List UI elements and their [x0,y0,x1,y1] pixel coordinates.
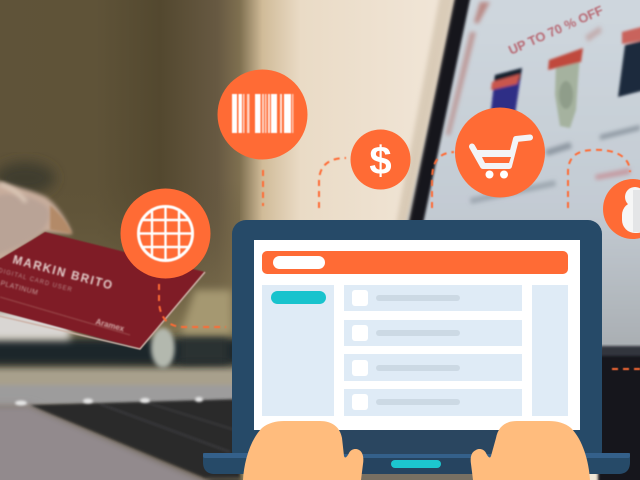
icon: barcode [218,70,308,160]
laptop lid [232,220,602,465]
blurred product: phone [490,68,522,118]
dark desk right [598,350,640,480]
list row 4 [344,389,522,416]
right hand [471,421,590,480]
icon: globe [120,188,210,278]
blurred side text [446,2,640,204]
bright object near card [151,328,175,368]
hand and credit card [0,180,205,349]
right sidebar [532,285,568,416]
card details: PLATINUM [0,280,39,297]
trackpad button [391,460,441,468]
icon: dollar: $ [369,139,392,183]
screen [254,240,580,430]
table band [0,366,240,406]
icon: partial circle at right edge [603,179,640,239]
hand [0,180,72,262]
blurred product: watch [548,48,583,128]
card logo: Aramex [94,317,126,334]
blurred product: dark box [618,26,640,97]
card name: MARKIN BRITO [11,254,115,293]
icon: dollar [350,130,410,190]
card [0,232,205,349]
dashed connectors [159,150,640,369]
desk surface [0,404,230,480]
list row 1 [344,285,522,311]
blurred sale text: UP TO 70 % OFF [506,2,606,58]
left hand [243,421,363,480]
laptop illustration [203,220,630,480]
icon: shopping cart [455,108,545,198]
laptop base [203,430,630,480]
keyboard [30,399,240,478]
header bar [262,251,568,274]
dark band behind card [0,338,240,365]
laptop screen in photo [396,0,640,356]
left sidebar [262,285,334,416]
list row 2 [344,320,522,346]
keyboard glints [15,397,203,406]
list row 3 [344,354,522,381]
